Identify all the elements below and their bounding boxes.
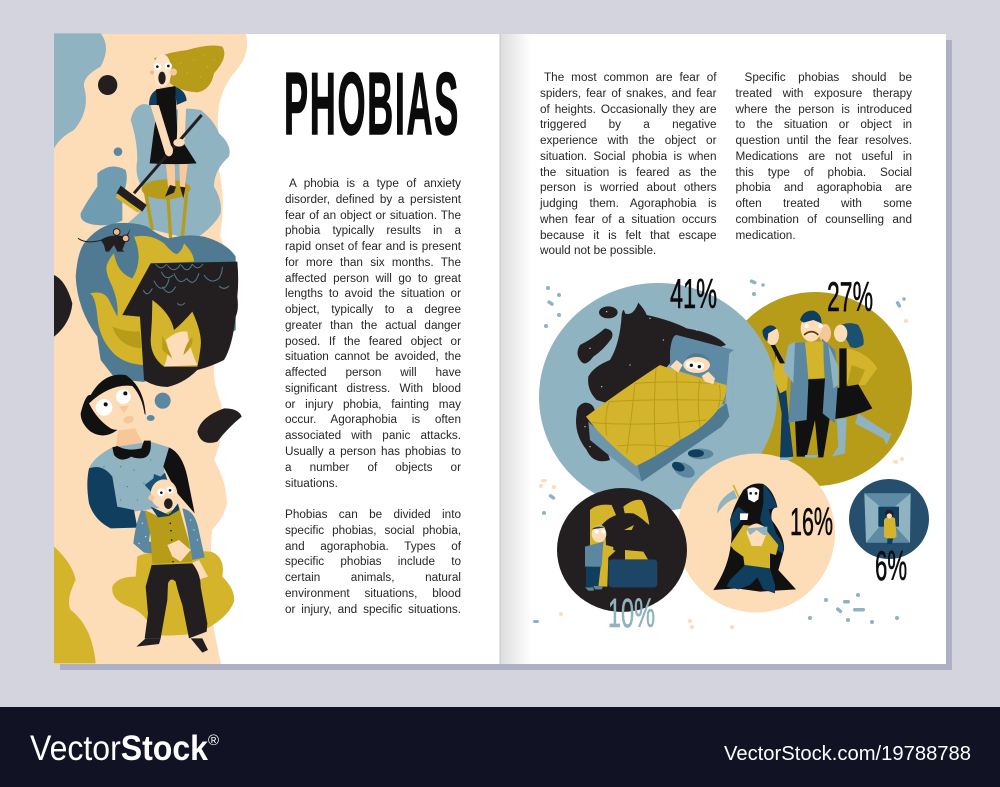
text block: treatment: combination of counselling and — [736, 213, 912, 226]
blue blob top left — [54, 33, 106, 148]
slippers — [670, 449, 713, 481]
text block: common phobias: because it is felt that escape — [540, 229, 716, 242]
trousers — [145, 563, 207, 638]
panel: left illustration strip — [54, 33, 247, 664]
percent 6: 6% — [875, 542, 907, 589]
text block: phobia definition: affected person will have — [285, 366, 461, 379]
black circle 10% — [557, 488, 687, 612]
collar — [112, 441, 151, 460]
roof scales — [143, 264, 229, 305]
text block: common phobias: experience with the object or — [540, 134, 716, 147]
registered mark: ® — [208, 732, 219, 749]
collar — [151, 503, 179, 517]
man coat — [788, 338, 838, 423]
text block: phobia definition: lengths to avoid the situation or — [285, 287, 461, 300]
text block: phobia definition: for more than six months. The — [285, 256, 461, 269]
boy — [133, 473, 208, 653]
arms — [151, 104, 186, 155]
text block: common phobias — [540, 71, 717, 257]
blue blob left — [81, 167, 127, 225]
yellow blob behind boy — [112, 551, 234, 636]
broom — [134, 115, 202, 193]
scene: girl on stool and burning house — [54, 33, 238, 387]
sleeves — [149, 87, 187, 105]
legs — [166, 162, 188, 188]
left sleeve — [87, 467, 137, 528]
peach background shape — [54, 34, 247, 664]
black dot — [98, 75, 117, 95]
mouse — [78, 228, 131, 252]
small blue dot — [114, 147, 122, 156]
bed scene — [576, 303, 892, 482]
footer bar — [0, 707, 1000, 787]
monster speckles — [584, 311, 697, 447]
reaper scene — [713, 483, 796, 593]
face — [89, 386, 145, 430]
footer image id: VectorStock.com/19788788 — [724, 743, 971, 765]
text block: phobia definition: and agoraphobia. Types of — [285, 540, 461, 553]
infographic: phobia statistics — [533, 270, 929, 636]
text block: phobia definition: phobia typically results in a — [285, 224, 461, 237]
person left — [775, 345, 793, 458]
dress — [150, 86, 197, 164]
flame shade — [112, 327, 141, 348]
text block: phobia definition: Phobias can be divided into — [285, 508, 461, 521]
black blob right — [197, 408, 242, 443]
brochure page — [54, 34, 946, 664]
flame large — [90, 236, 194, 365]
neck — [160, 80, 170, 90]
text block: phobia definition: a number of objects or — [285, 461, 461, 474]
text block: common phobias: would not be possible. — [540, 244, 656, 257]
text block: phobia definition: situation cannot be avoided, the — [285, 350, 461, 363]
text block: phobia definition: rapid onset of fear and is present — [285, 240, 461, 253]
text block: treatment: phobia and agoraphobia are — [736, 181, 912, 194]
text: PHOBIAS — [284, 54, 460, 153]
text block: treatment: medication. — [736, 229, 796, 242]
neck — [116, 427, 142, 455]
dog scene — [585, 500, 657, 591]
girl — [116, 46, 224, 212]
text block: phobia definition: greater than the actual danger — [285, 319, 461, 332]
man trousers — [795, 378, 830, 457]
fire core — [164, 331, 197, 367]
room scene — [864, 493, 911, 544]
dark head shape — [76, 223, 236, 382]
text block: phobia definition: or injury, and specific situations. — [285, 603, 461, 616]
monster — [576, 303, 726, 461]
blue blob behind girl — [127, 104, 230, 240]
navy circle 6% — [849, 479, 929, 559]
text block: phobia definition: or injury phobia, fainting may — [285, 398, 461, 411]
head — [151, 479, 177, 509]
boy in bed — [683, 353, 710, 373]
woman body — [839, 348, 847, 388]
text block: phobia definition: object, typically to a degree — [285, 303, 461, 316]
right sleeve — [163, 447, 195, 513]
confetti dots — [533, 279, 906, 624]
percent 10: 10% — [608, 590, 655, 636]
footer logo: VectorStock — [30, 729, 208, 768]
face — [153, 54, 171, 87]
text block: treatment: question until the fear resolves. — [736, 134, 912, 147]
text block: common phobias: judging them. Agoraphobia is — [540, 197, 716, 210]
spiky hair — [145, 473, 167, 495]
text block: common phobias: spiders, fear of snakes, and fear — [540, 87, 716, 100]
shoes — [136, 638, 208, 653]
black blob left edge — [54, 275, 72, 337]
flame in house — [151, 300, 201, 367]
man sweater — [805, 342, 824, 378]
text block: treatment: to the situation or object in — [736, 118, 912, 131]
text block: common phobias: of heights. Occasionally they are — [540, 103, 716, 116]
text block: phobia definition: Usually a person has phobias to — [285, 445, 461, 458]
text block: phobia definition: significant distress. With blood — [285, 382, 461, 395]
text block: treatment — [736, 71, 912, 242]
text block: phobia definition — [285, 177, 462, 616]
percent 41: 41% — [670, 270, 717, 317]
woman hair — [835, 323, 864, 348]
vest — [145, 507, 192, 564]
headboard — [670, 335, 734, 410]
crowd scene — [763, 311, 892, 460]
percent 16: 16% — [790, 501, 833, 544]
text block: phobia definition: fear of an object or situation. The — [285, 209, 461, 222]
text block: phobia definition: affected person will go to great — [285, 272, 461, 285]
text block: phobia definition: disorder, defined by a persistent — [285, 193, 461, 206]
hands — [167, 540, 191, 562]
text block: common phobias: the situation is feared as the — [540, 166, 716, 179]
text block: phobia definition: certain animals, natural — [285, 571, 461, 584]
text block: phobia definition: A phobia is a type of anxiety — [289, 177, 461, 190]
yellow corner blob — [54, 547, 96, 663]
man head — [801, 315, 821, 342]
olive circle 27% — [718, 292, 912, 486]
text block: common phobias: situation. Social phobia is when — [540, 150, 716, 163]
text block: treatment: often treated with some — [736, 197, 912, 210]
shoes — [780, 455, 818, 460]
text block: treatment: this type of phobia. Social — [736, 166, 912, 179]
black house — [122, 262, 238, 387]
text block: phobia definition: posed. If the feared object or — [285, 335, 461, 348]
text block: phobia definition: specific phobias include to — [285, 555, 461, 568]
stool — [141, 179, 191, 238]
page shadow — [60, 40, 952, 670]
text block: phobia definition: situations. — [285, 477, 338, 490]
text block: common phobias: person is worried about others — [540, 181, 716, 194]
text block: phobia definition: environment situations, blood — [285, 587, 461, 600]
hair — [81, 375, 146, 435]
scene: woman and boy — [54, 375, 242, 663]
sweater — [89, 442, 169, 512]
text block: common phobias: when fear of a situation occurs — [540, 213, 716, 226]
blanket — [586, 365, 727, 466]
thought dots — [147, 393, 171, 421]
text block: phobia definition: specific phobias, social phobia, — [285, 524, 461, 537]
blue circle 41% — [539, 283, 777, 511]
hands — [670, 360, 715, 384]
text block: common phobias: The most common are fear of — [544, 71, 716, 84]
text block: phobia definition: associated with panic attacks. — [285, 429, 461, 442]
woman — [81, 375, 195, 528]
hair — [154, 46, 224, 92]
shoes — [165, 185, 185, 198]
right woman legs — [832, 413, 892, 457]
text block: treatment: Medications are not useful in — [736, 150, 912, 163]
percent 27: 27% — [827, 273, 873, 320]
bed frame — [588, 422, 642, 482]
fear scenes — [585, 483, 911, 593]
text block: common phobias: triggered by a negative — [540, 118, 716, 131]
peach circle 16% — [677, 454, 835, 612]
text block: treatment: treated with exposure therapy — [736, 87, 912, 100]
text block: phobia definition: occur. Agoraphobia is often — [285, 413, 461, 426]
text block: treatment: where the person is introduced — [736, 103, 912, 116]
hands — [173, 139, 185, 147]
shirt arms — [133, 510, 169, 555]
text block: treatment: Specific phobias should be — [744, 71, 912, 84]
back head — [819, 324, 831, 343]
